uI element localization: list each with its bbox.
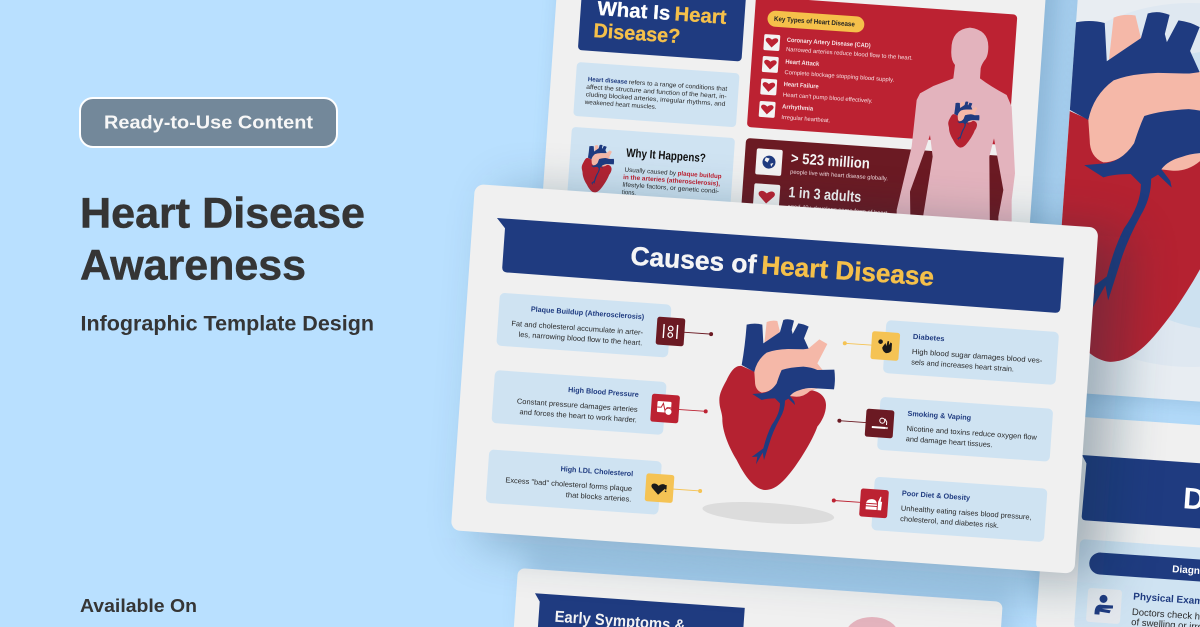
- slide: diagnosis: [1036, 415, 1200, 627]
- why text: [622, 167, 722, 203]
- slide: What Is Heart Disease: [531, 0, 1048, 394]
- stat: 1 in 3 adults: [753, 182, 889, 219]
- title text: Heart Disease: [760, 250, 935, 292]
- title banner: [578, 0, 750, 61]
- icon: heart warning: [645, 473, 674, 503]
- card: [451, 184, 1098, 574]
- anatomical heart: [719, 319, 835, 490]
- cause: poor diet and obesity: cholesterol, and diabetes risk.: [900, 514, 999, 530]
- item: heart attack: Complete blockage stopping blood supply.: [784, 70, 895, 84]
- definition panel: [573, 62, 740, 127]
- body silhouette with heart: [897, 28, 1015, 240]
- cause: diabetes: [841, 317, 1059, 385]
- key types pill: Key Types of Heart Disease: [774, 16, 855, 28]
- slide sheet: [531, 0, 1048, 394]
- item: heart attack: Heart Attack: [785, 59, 820, 68]
- item: heart failure: Heart can't pump blood effectively.: [783, 92, 873, 105]
- main card shadow: [479, 194, 1126, 584]
- why text: Usually caused by: [624, 167, 677, 177]
- cause: smoking and vaping: [836, 394, 1053, 462]
- title text: Causes of: [630, 241, 758, 279]
- item: arrhythmia: Arrhythmia: [782, 103, 814, 113]
- definition text: [583, 76, 728, 116]
- title banner: [493, 218, 1064, 313]
- item: arrhythmia: [758, 101, 832, 124]
- main heading: [80, 190, 365, 289]
- connector: [837, 419, 867, 425]
- item: heart failure: [760, 78, 874, 105]
- connector: [672, 487, 702, 493]
- available on label: Available On: [80, 596, 197, 616]
- stat: 523 million: > 523 million: [790, 150, 870, 173]
- stat: 523 million: people live with heart disease globally.: [790, 170, 888, 182]
- cause: high blood pressure: High Blood Pressure: [568, 385, 639, 399]
- diagnosis panel: [1074, 539, 1200, 627]
- item: coronary artery disease: [763, 34, 914, 62]
- cause: poor diet and obesity: Poor Diet & Obesity: [902, 489, 971, 502]
- silhouette: [897, 28, 1015, 240]
- cause: smoking and vaping: Nicotine and toxins reduce oxygen flow: [906, 424, 1038, 442]
- definition text: cluding blocked arteries, irregular rhythms, and: [585, 91, 726, 108]
- halo outer: [1070, 3, 1200, 367]
- cause: diabetes: sels and increases heart strain.: [911, 357, 1014, 374]
- item: arrhythmia: Irregular heartbeat.: [781, 115, 831, 124]
- icon: plate and cutlery: [656, 317, 685, 346]
- icon: cigarette: [865, 409, 895, 438]
- item: heart attack: [762, 56, 896, 84]
- examination text: [1131, 592, 1200, 627]
- stat: 1 in 3 adults: aged 40+ develops some form of heart: [787, 204, 888, 217]
- banner: [532, 593, 745, 627]
- why text: plaque buildup: [677, 170, 722, 180]
- statistics panel: [733, 138, 1007, 346]
- why heading: Why It Happens?: [626, 146, 706, 165]
- connector: [678, 407, 708, 413]
- sheet: [511, 568, 1003, 627]
- cause: diabetes: High blood sugar damages blood ves-: [912, 347, 1043, 365]
- slide shadow: top slide: [549, 0, 1066, 287]
- stat: 523 million: [755, 148, 890, 183]
- why text: tions.: [622, 189, 636, 197]
- item: coronary artery disease: Coronary Artery Disease (CAD): [787, 37, 871, 50]
- badge: ready-to-use content: Ready-to-Use Content: [104, 111, 313, 132]
- icon: pressure monitor: [650, 394, 680, 423]
- cause: high blood pressure: [491, 370, 710, 438]
- icon: small heart in why panel: [582, 145, 614, 193]
- why text: lifestyle factors, or genetic condi-: [622, 181, 719, 195]
- title text: Disease?: [593, 20, 681, 48]
- definition text: refers to a range of conditions that: [628, 79, 728, 93]
- cause: high ldl cholesterol: High LDL Cholesterol: [560, 464, 633, 478]
- icon: burger and drink: [859, 488, 889, 518]
- halo inner: [1168, 52, 1200, 328]
- large heart: [1062, 12, 1200, 362]
- main heading: Awareness: [80, 241, 306, 289]
- slide: early symptoms: [511, 568, 1003, 627]
- icon: blood drop and hand: [870, 331, 900, 361]
- definition text: weakened heart muscles.: [583, 99, 657, 111]
- cause: high ldl cholesterol: that blocks arteries.: [566, 490, 632, 504]
- small heart: [948, 102, 979, 148]
- silhouette head: [846, 617, 898, 627]
- connector: [683, 330, 713, 336]
- title text: [630, 241, 935, 292]
- cause: high blood pressure: and forces the heart to work harder.: [519, 407, 637, 424]
- connector: [843, 341, 873, 347]
- cause: high ldl cholesterol: [486, 449, 704, 518]
- key types pill: [767, 10, 865, 33]
- cause: plaque buildup: les, narrowing blood flow to the heart.: [518, 330, 643, 347]
- icon: physician: [1086, 588, 1122, 624]
- slide shadow: bottom: [522, 549, 1017, 627]
- cause: diabetes: Diabetes: [913, 332, 945, 343]
- key types panel: [747, 0, 1017, 145]
- panel: causes of heart disease: [451, 184, 1098, 574]
- stat: 1 in 3 adults: 1 in 3 adults: [788, 184, 862, 206]
- item: coronary artery disease: Narrowed arteries reduce blood flow to the heart.: [786, 47, 913, 62]
- why text: in the arteries (atherosclerosis),: [623, 174, 721, 188]
- sheet: [1062, 0, 1200, 402]
- cause: poor diet and obesity: Unhealthy eating raises blood pressure,: [901, 504, 1032, 522]
- cause: smoking and vaping: and damage heart tissues.: [905, 434, 993, 449]
- slide shadow: top right: [1046, 0, 1200, 412]
- cause: high ldl cholesterol: Excess "bad" cholesterol forms plaque: [505, 475, 632, 493]
- sheet: [1036, 415, 1200, 627]
- cause: smoking and vaping: Smoking & Vaping: [907, 409, 971, 422]
- badge: ready-to-use content: [80, 98, 337, 147]
- definition text: affect the structure and function of the heart, in-: [586, 84, 727, 101]
- subheading: Infographic Template Design: [80, 313, 374, 336]
- why it happens panel: [562, 127, 735, 278]
- connector: [832, 498, 862, 504]
- banner: [1077, 455, 1200, 535]
- title text: Heart: [674, 3, 728, 29]
- cause: high blood pressure: Constant pressure damages arteries: [517, 396, 638, 414]
- cause: plaque buildup: [496, 293, 715, 361]
- cause: poor diet and obesity: [830, 474, 1048, 542]
- main heading: Heart Disease: [80, 190, 365, 238]
- item: heart failure: Heart Failure: [783, 81, 819, 90]
- cause: plaque buildup: Fat and cholesterol accumulate in arter-: [511, 319, 644, 337]
- slide: large heart: [1062, 0, 1200, 402]
- definition text: Heart disease: [588, 76, 628, 86]
- slide shadow: lower right: [1032, 421, 1200, 624]
- title text: [593, 0, 728, 51]
- cause: plaque buildup: Plaque Buildup (Atherosclerosis): [531, 304, 645, 321]
- heart shadow: [702, 498, 835, 528]
- pill: [1089, 552, 1200, 588]
